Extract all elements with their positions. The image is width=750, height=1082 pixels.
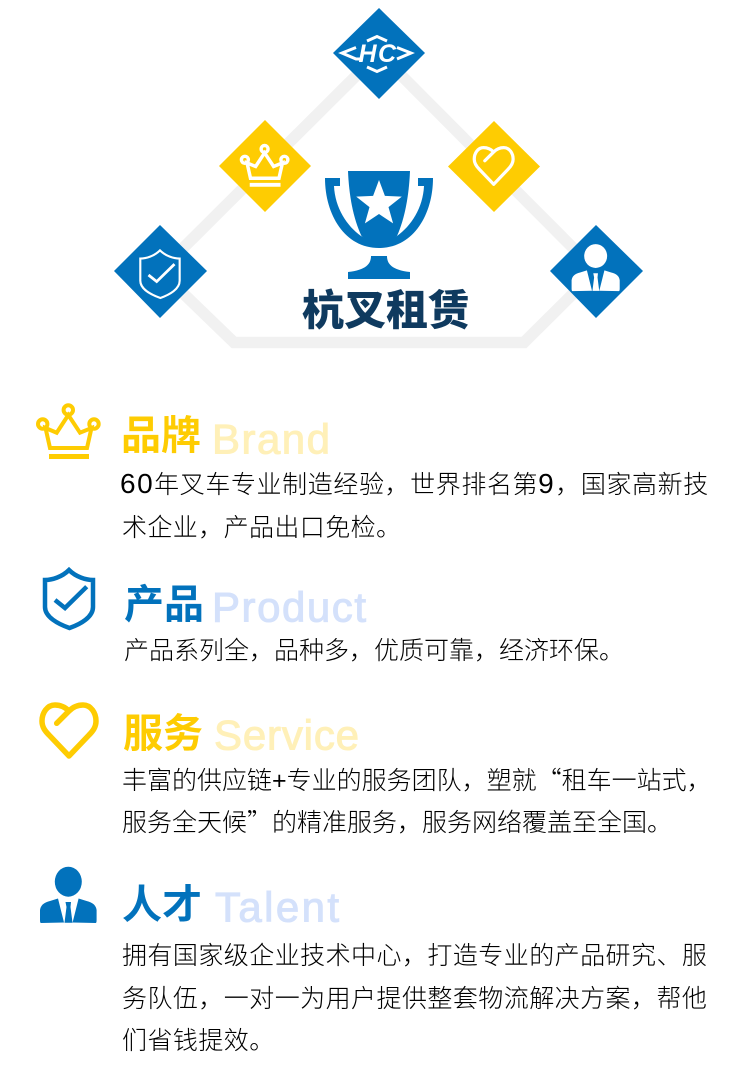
panel: service: [42, 705, 712, 839]
heading: talent: Talent: [215, 884, 339, 931]
body text: talent: 务队伍，一对一为用户提供整套物流解决方案，帮他: [122, 985, 707, 1013]
panel: product: [45, 570, 624, 665]
body text: talent: 拥有国家级企业技术中心，打造专业的产品研究、服: [122, 942, 707, 970]
icon: shield: [45, 570, 93, 628]
panel: brand: [38, 405, 709, 542]
body text: brand: 60年叉车专业制造经验，世界排名第9，国家高新技: [120, 468, 709, 499]
heading: product: [124, 583, 366, 631]
diamond: heart: [448, 121, 540, 212]
body text: service: 丰富的供应链+专业的服务团队，塑就“租车一站式，: [122, 761, 712, 797]
diamond: shield: [114, 225, 207, 318]
body text: talent: [122, 942, 707, 1055]
diamond: crown: [219, 120, 311, 212]
body text: service: 服务全天候”的精准服务，服务网络覆盖至全国。: [122, 803, 672, 839]
body text: brand: 术企业，产品出口免检。: [122, 514, 401, 542]
heading: brand: 品牌: [121, 414, 201, 458]
diamond: person: [550, 225, 643, 318]
body text: talent: 们省钱提效。: [122, 1027, 275, 1055]
heading: brand: [121, 414, 330, 462]
body text: service: [122, 761, 712, 839]
icon: person: [40, 867, 97, 923]
heading: product: Product: [212, 584, 366, 631]
heading: brand: Brand: [212, 416, 330, 462]
body text: brand: [120, 468, 709, 542]
icon: trophy: [325, 171, 433, 279]
heading: talent: 人才: [122, 883, 202, 927]
icon: heart: [42, 705, 96, 756]
diamond: HC logo: HC: [358, 40, 398, 68]
heading: service: Service: [214, 711, 359, 758]
heading: service: 服务: [123, 712, 203, 756]
body text: product: 产品系列全，品种多，优质可靠，经济环保。: [124, 637, 624, 665]
panel: talent: [40, 867, 707, 1055]
title: 杭叉租赁: [302, 287, 470, 334]
connecting track: [160, 53, 596, 342]
heading: talent: [122, 883, 339, 931]
diamond: HC logo: [333, 8, 425, 99]
heading: service: [123, 711, 359, 758]
panel: hero diagram: [114, 8, 643, 342]
icon: crown: [38, 405, 99, 456]
heading: product: 产品: [124, 583, 204, 627]
